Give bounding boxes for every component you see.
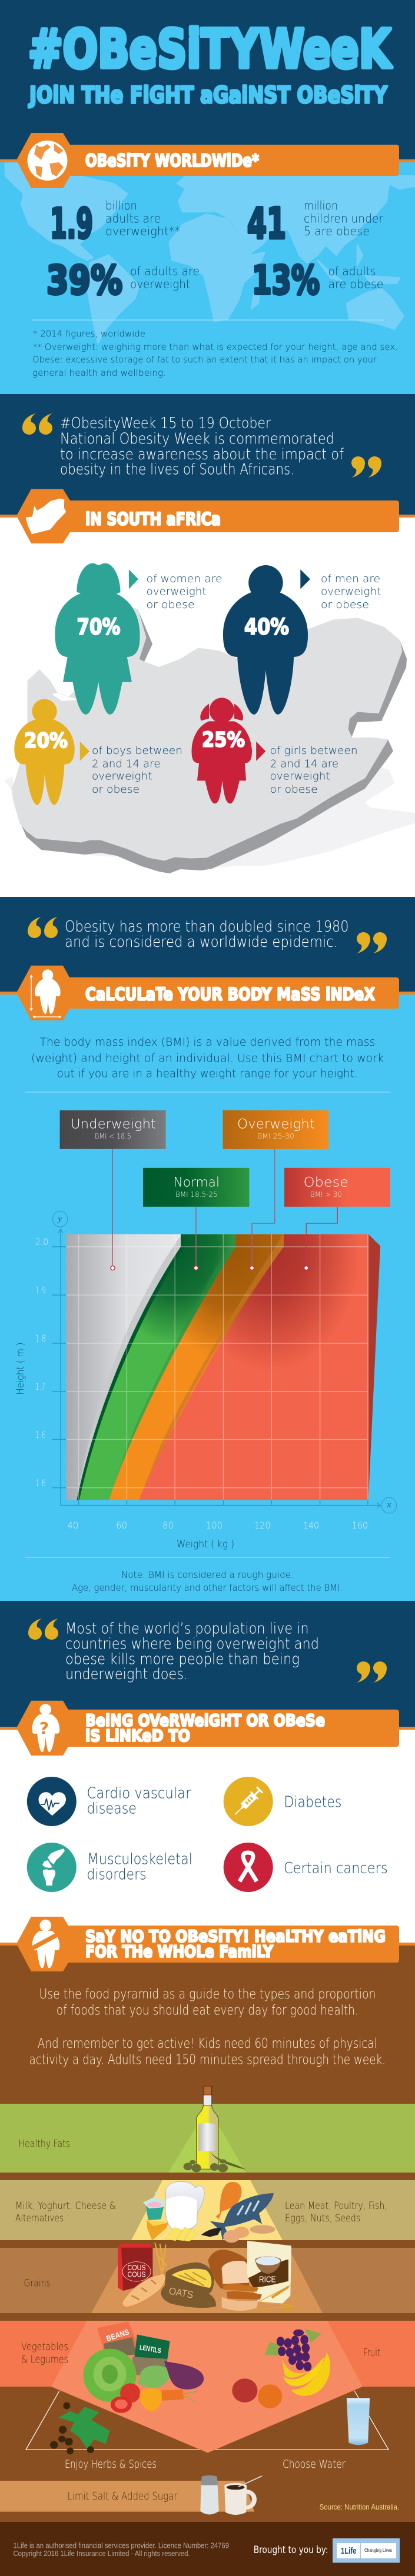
- quote: world's population: obese kills more people than being: [65, 1650, 300, 1668]
- herbs label: Enjoy Herbs & Spices: [65, 2458, 157, 2471]
- quote: obesity doubled: Obesity has more than doubled since 1980: [65, 918, 348, 936]
- pyramid band: dairy and protein: Alternatives: [15, 2213, 64, 2224]
- figure: boys 20%: or obese: [92, 783, 140, 796]
- item: musculoskeletal disorders: disorders: [87, 1866, 146, 1884]
- item: certain cancers: [224, 1843, 388, 1892]
- package labels: beans and lentils: BEANS: [105, 2327, 130, 2343]
- package labels: beans and lentils: [105, 2327, 162, 2355]
- water label: Choose Water: [283, 2458, 346, 2471]
- package labels: RICE: [259, 2275, 275, 2285]
- figure: girls 25%: of girls between: [270, 745, 358, 757]
- vegetables: [84, 2321, 204, 2413]
- icon: crossed figure: [29, 1920, 61, 1968]
- limit salt and sugar band: Limit Salt & Added Sugar: [68, 2490, 178, 2503]
- banner: healthy eating: [0, 1917, 415, 1971]
- stat: 41 million: 41: [247, 199, 286, 248]
- x axis labels: 100: [206, 1520, 223, 1531]
- coffee mug: [224, 2476, 262, 2515]
- package labels: beans and lentils: LENTILS: [139, 2343, 162, 2355]
- package labels: [127, 2263, 275, 2301]
- figure: men 40%: overweight: [321, 586, 381, 598]
- figure: girls 25%: 2 and 14 are: [270, 758, 338, 770]
- icon: figure with question mark: [32, 1704, 59, 1752]
- item: musculoskeletal disorders: [27, 1843, 192, 1892]
- bmi intro text: out if you are in a healthy weight range for your height.: [57, 1067, 358, 1080]
- quote: world's population: underweight does.: [65, 1666, 188, 1683]
- label: normal: BMI 18.5-25: [175, 1190, 218, 1199]
- x axis labels: 80: [162, 1520, 174, 1531]
- salt shaker: [200, 2475, 219, 2514]
- bmi note: Note: BMI is considered a rough guide.: [121, 1569, 294, 1580]
- healthy eating intro text: [29, 1987, 386, 2068]
- source: Source: Nutrition Australia.: [320, 2503, 399, 2511]
- quote: world's population: [28, 1619, 387, 1683]
- footer legal text: 1Life is an authorised financial services provider. Licence Number: 24769: [13, 2542, 229, 2550]
- chart axes: [52, 1211, 397, 1513]
- figure: boys 20%: [14, 699, 182, 805]
- figure: girls 25%: or obese: [270, 783, 318, 796]
- fruit: [232, 2328, 330, 2408]
- banner: obesity worldwide: [0, 133, 415, 188]
- stat: 1.9 billion: 1.9: [50, 200, 93, 248]
- pyramid band: healthy fats: Healthy Fats: [19, 2138, 70, 2150]
- stat: 41 million: million: [304, 199, 338, 213]
- quote: national obesity week: National Obesity Week is commemorated: [60, 430, 334, 448]
- bmi intro text: (weight) and height of an individual. Use this BMI chart to work: [31, 1053, 384, 1065]
- grain foods: [118, 2241, 294, 2311]
- footnotes: general health and wellbeing.: [32, 368, 166, 378]
- pyramid band: vegetables and fruit: Fruit: [363, 2347, 380, 2359]
- footnotes: Obese: excessive storage of fat to such an extent that it has an impact on your: [32, 355, 377, 365]
- icon: figure with question mark: ?: [39, 1719, 49, 1738]
- banner: linked to: [0, 1701, 415, 1756]
- figure: women 70%: or obese: [147, 599, 195, 611]
- label: underweight: BMI < 18.5: [95, 1132, 131, 1140]
- figure: boys 20%: overweight: [92, 770, 152, 782]
- quote: national obesity week: obesity in the lives of South Africans.: [60, 461, 294, 478]
- stat: 1.9 billion: adults are: [105, 212, 161, 226]
- figure: boys 20%: of boys between: [92, 745, 182, 757]
- label: obese: Obese: [304, 1176, 348, 1190]
- banner: in south africa: [0, 489, 415, 543]
- 1life logo: Changing Lives: [364, 2548, 392, 2553]
- limit salt and sugar band: [0, 2475, 262, 2515]
- figure: women 70%: of women are: [147, 573, 223, 585]
- item: certain cancers: Certain cancers: [284, 1860, 388, 1877]
- figure: men 40%: 40%: [244, 614, 289, 640]
- y axis labels: 1.6: [35, 1477, 46, 1489]
- water glass: [347, 2398, 370, 2445]
- pyramid band: grains: Grains: [24, 2278, 51, 2290]
- pyramid band: dairy and protein: Eggs, Nuts, Seeds: [285, 2213, 360, 2224]
- stat: 41 million: children under: [304, 212, 384, 226]
- stat: 1.9 billion: [50, 199, 180, 248]
- item: musculoskeletal disorders: Musculoskeletal: [87, 1850, 192, 1868]
- figure: women 70%: [55, 563, 223, 715]
- y axis labels: 2.0: [35, 1236, 48, 1247]
- quote: world's population: Most of the world’s population live in: [65, 1620, 309, 1637]
- footnotes: ** Overweight: weighing more than what is expected for your height, age and sex.: [33, 342, 398, 352]
- label: overweight: Overweight: [237, 1117, 315, 1132]
- banner heading: [85, 1710, 325, 1746]
- icon: south africa map: [26, 499, 66, 534]
- x axis labels: 120: [254, 1520, 271, 1531]
- dairy and protein foods: [143, 2181, 275, 2243]
- banner heading: OBeSiTY WORLDWiDe*: [85, 151, 259, 171]
- footer legal text: [13, 2542, 229, 2558]
- herbs and spices: [50, 2403, 110, 2454]
- oil bottle: [184, 2086, 246, 2173]
- stat: 41 million: [247, 199, 384, 248]
- stat: 39%: 39%: [47, 258, 122, 303]
- stat: 1.9 billion: billion: [105, 199, 137, 213]
- figure: boys 20%: 20%: [24, 729, 68, 753]
- package labels: COUS: [127, 2263, 146, 2272]
- y axis labels: [35, 1236, 48, 1489]
- package labels: COUS: [127, 2270, 146, 2278]
- pyramid band: vegetables and fruit: Vegetables: [21, 2341, 68, 2353]
- bmi intro text: [31, 1036, 384, 1080]
- figure: girls 25%: 25%: [202, 728, 245, 752]
- stat: 1.9 billion: overweight**: [105, 224, 180, 238]
- pyramid band: healthy fats: [0, 2086, 415, 2173]
- banner heading: iS LiNKeD TO: [85, 1726, 190, 1746]
- pyramid band: vegetables and fruit: [0, 2321, 415, 2452]
- stat: 39%: [47, 258, 200, 303]
- brought to you by: Brought to you by:: [254, 2544, 328, 2556]
- stat: 41 million: 5 are obese: [304, 224, 370, 238]
- quote: national obesity week: #ObesityWeek 15 to 19 October: [60, 415, 271, 432]
- figure: men 40%: or obese: [321, 599, 369, 611]
- icon: globe: [27, 141, 67, 181]
- y axis labels: 1.6: [35, 1429, 46, 1440]
- label: obese: [284, 1168, 390, 1270]
- footer legal text: Copyright 2016 1Life Insurance Limited - All rights reserved.: [13, 2550, 190, 2558]
- item: cardio vascular disease: disease: [87, 1800, 137, 1818]
- banner heading: BeiNG OVeRWeiGHT OR OBeSe: [85, 1710, 325, 1730]
- label: overweight: [223, 1110, 328, 1270]
- footnotes: * 2014 figures, worldwide: [33, 328, 145, 339]
- item: cardio vascular disease: Cardio vascular: [87, 1784, 191, 1802]
- pyramid band: dairy and protein: [0, 2180, 415, 2243]
- x axis labels: 140: [303, 1520, 319, 1531]
- figure: girls 25%: overweight: [270, 770, 330, 782]
- axis letter x: x: [386, 1500, 391, 1510]
- pyramid band: dairy and protein: Lean Meat, Poultry, Fish,: [285, 2200, 387, 2212]
- item: diabetes: [224, 1777, 341, 1826]
- item: cardio vascular disease: [27, 1777, 191, 1826]
- pyramid band: vegetables and fruit: & Legumes: [21, 2354, 68, 2365]
- figure: boys 20%: 2 and 14 are: [92, 758, 160, 770]
- banner: calculate bmi: [0, 966, 415, 1020]
- footnotes: [32, 328, 398, 378]
- chart plot areas: [66, 1234, 380, 1500]
- label: underweight: [60, 1110, 166, 1270]
- stat: 13%: are obese: [328, 277, 384, 291]
- label: normal: [143, 1168, 250, 1270]
- y axis labels: 1.9: [35, 1284, 46, 1296]
- axis letter y: y: [57, 1214, 62, 1224]
- x axis labels: 60: [116, 1520, 127, 1531]
- item: diabetes: Diabetes: [284, 1794, 341, 1811]
- 1life logo: [333, 2538, 400, 2563]
- bmi note: Age, gender, muscularity and other factors will affect the BMI.: [72, 1582, 343, 1593]
- pyramid band: dairy and protein: Milk, Yoghurt, Cheese &: [15, 2200, 116, 2212]
- x axis labels: [68, 1520, 368, 1531]
- package labels: OATS: [168, 2285, 194, 2301]
- y axis labels: 1.7: [35, 1381, 45, 1392]
- 1life logo: 1Life: [341, 2546, 357, 2556]
- south africa 3d map: [4, 608, 415, 873]
- icon: body measure: [29, 969, 61, 1018]
- figure: women 70%: overweight: [147, 586, 207, 598]
- label: underweight: Underweight: [71, 1117, 156, 1132]
- stat: 39%: overweight: [130, 277, 190, 291]
- x axis title: Weight ( kg ): [177, 1539, 234, 1550]
- stat: 13%: of adults: [328, 264, 376, 278]
- quote: national obesity week: to increase awareness about the impact of: [60, 446, 344, 463]
- x axis labels: 160: [352, 1520, 368, 1531]
- pyramid band: grains: [0, 2241, 415, 2313]
- stat: 39%: of adults are: [130, 264, 200, 278]
- quote: obesity doubled: and is considered a worldwide epidemic.: [65, 933, 338, 951]
- world map background: [5, 163, 415, 343]
- label: normal: Normal: [173, 1176, 220, 1190]
- figure: men 40%: of men are: [321, 573, 380, 585]
- bmi note: [72, 1569, 343, 1593]
- x axis labels: 40: [68, 1520, 78, 1531]
- quote: national obesity week: [22, 413, 381, 478]
- banner heading: iN SOUTH aFRiCa: [85, 509, 221, 529]
- figure: women 70%: 70%: [77, 614, 120, 640]
- banner heading: FOR THe WHOLe FamiLY: [85, 1942, 274, 1961]
- figure: girls 25%: [192, 698, 358, 803]
- y axis title: Height ( m ): [15, 1342, 26, 1395]
- bmi intro text: The body mass index (BMI) is a value derived from the mass: [39, 1036, 375, 1049]
- label: overweight: BMI 25-30: [257, 1132, 294, 1140]
- figure: men 40%: [223, 565, 381, 715]
- y axis labels: 1.8: [35, 1333, 46, 1344]
- bmi chart: [15, 1110, 397, 1550]
- label: obese: BMI > 30: [310, 1190, 342, 1199]
- quote: obesity doubled: [28, 917, 387, 953]
- stat: 13%: 13%: [252, 258, 320, 303]
- banner heading: [85, 1927, 386, 1961]
- quote: world's population: countries where being overweight and: [65, 1635, 319, 1653]
